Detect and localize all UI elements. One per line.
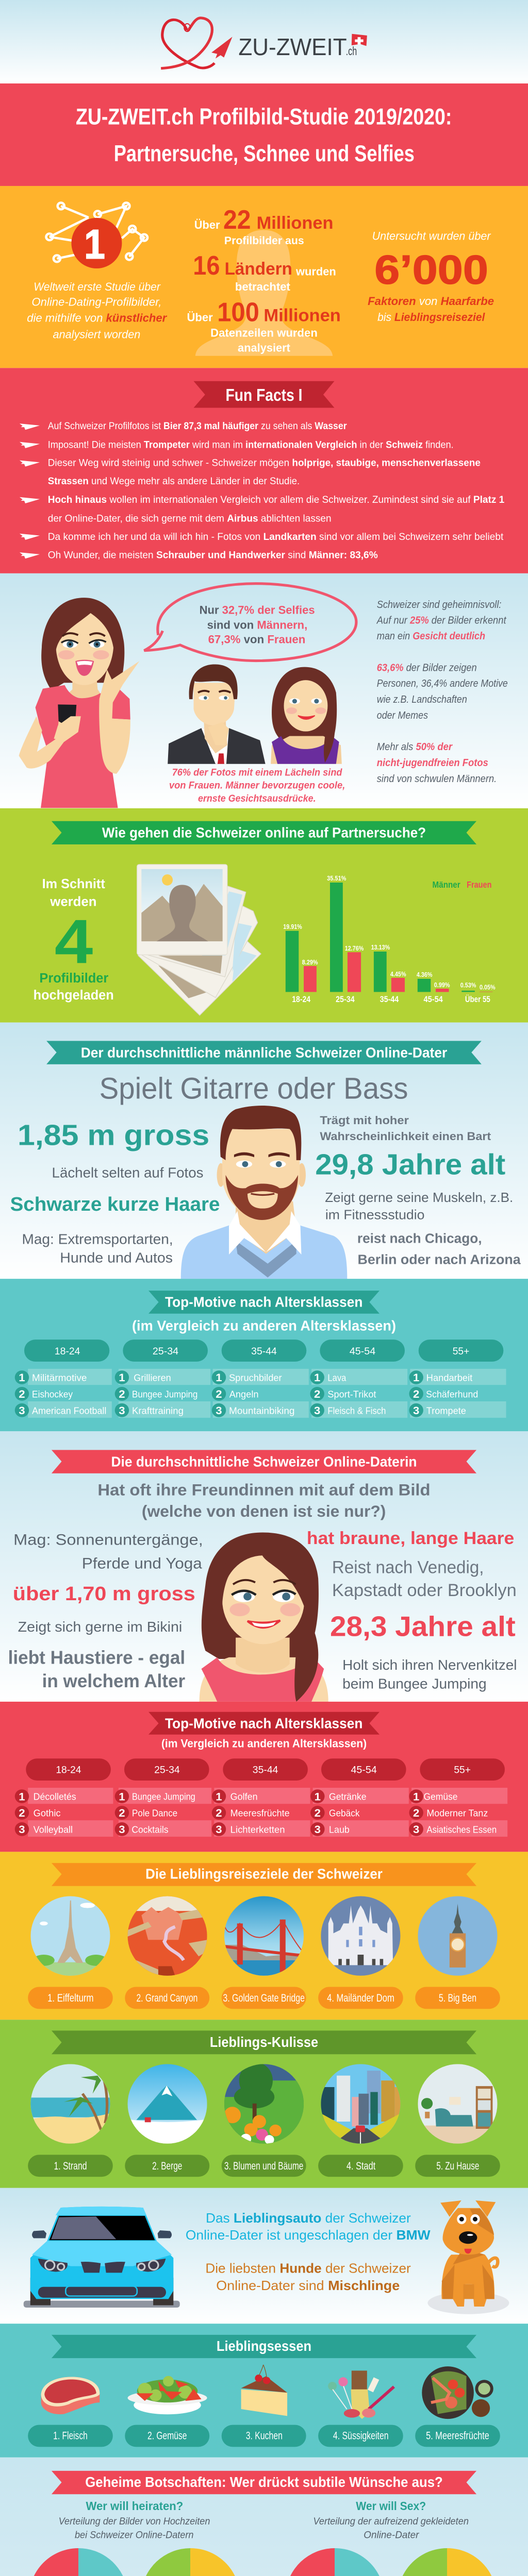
text: female traits left: Mag: Sonnenuntergänge, [13, 1532, 203, 1549]
text: who wants to marry: Wer will heiraten? [86, 2499, 183, 2513]
labels: backdrops [28, 2155, 500, 2177]
text: friends on picture [97, 1481, 431, 1520]
text: four profile pictures [34, 876, 114, 1003]
table: ranked motives by age: 1 [413, 1371, 419, 1384]
subheading: (im Vergleich zu anderen Altersklassen) [132, 1318, 396, 1333]
panel: Fun Facts I [0, 368, 528, 573]
text: who wants to marry [59, 2499, 210, 2541]
text: female traits left: über 1,70 m gross [13, 1583, 195, 1605]
chart: photos per age group: 0.99% [434, 981, 450, 989]
text: female traits right: Holt sich ihren Nervenkitzel [342, 1657, 517, 1673]
panel: favourite car and dog [0, 2188, 528, 2324]
labels: food: 3. Kuchen [246, 2429, 283, 2442]
table: ranked motives by age: Golfen [230, 1791, 258, 1802]
callout: speech bubble selfies: Nur 32,7% der Selfies [200, 604, 315, 616]
heading ribbon [52, 2471, 476, 2494]
text: male traits left: Lächelt selten auf Fotos [52, 1165, 203, 1181]
list: fun facts: Imposant! Die meisten Trompeter wird man im internationalen Vergleich in der Schweiz finden. [48, 439, 454, 450]
text: male traits left: Hunde und Autos [60, 1250, 173, 1266]
icon: Big Ben [418, 1896, 498, 1976]
chart: photos per age group: 18-24 [292, 994, 311, 1004]
age group pills: 35-44 [253, 1765, 278, 1775]
text: female traits left: Zeigt sich gerne im Bikini [18, 1619, 182, 1635]
labels: destinations: 1. Eiffelturm [47, 1991, 94, 2004]
heading ribbon: Fun Facts I: Fun Facts I [226, 386, 302, 405]
table: ranked motives by age: 3 [216, 1823, 222, 1836]
table: ranked motives by age: Sport-Trikot [327, 1389, 376, 1399]
labels: backdrops: 3. Blumen und Bäume [224, 2159, 303, 2172]
chart: photos per age group: 8.29% [302, 958, 318, 966]
chart: photos per age group: 19.91% [283, 923, 302, 930]
icon: neural network with number 1: 1 [84, 222, 105, 267]
text: female traits right: hat braune, lange Haare [307, 1528, 514, 1548]
chart: marriage by orientation [141, 2548, 240, 2576]
table: ranked motives by age: 1 [19, 1371, 25, 1384]
panel: top motives men [0, 1279, 528, 1431]
illustration: thinking man [168, 664, 266, 764]
table: ranked motives by age: 3 [216, 1404, 222, 1417]
table: ranked motives by age: Lava [327, 1372, 346, 1383]
text: study statistics: Ländern [225, 259, 292, 279]
text: study statistics: wurden [295, 265, 336, 278]
labels: food: 1. Fleisch [53, 2429, 88, 2442]
text: photo motive facts: wie z.B. Landschaften [377, 693, 467, 705]
text: photo motive facts: sind von schwulen Männern. [377, 773, 497, 785]
chart: photos per age group: 25-34 [336, 994, 355, 1004]
text: 6000 factors: 6’000 [374, 247, 488, 292]
table: ranked motives by age: Pole Dance [132, 1808, 177, 1818]
illustration: mixed-breed dog [427, 2200, 509, 2314]
text: photo motive facts: Auf nur 25% der Bilder erkennt [376, 615, 507, 626]
chart: photos per age group: 0.53% [460, 981, 476, 989]
icon: mountains [128, 2064, 207, 2144]
chart: photos per age group: Männer [433, 879, 460, 890]
text: who wants to marry: Verteilung der Bilder von Hochzeiten [59, 2516, 210, 2527]
text: first study worldwide [27, 280, 167, 341]
text: female traits right: beim Bungee Jumping [342, 1676, 487, 1692]
table: ranked motives by age: 2 [413, 1806, 419, 1819]
chart: photos per age group: 35-44 [380, 994, 399, 1004]
labels: backdrops: 2. Berge [152, 2159, 182, 2172]
logo: ZU-ZWEIT.ch [161, 18, 367, 69]
text: photo motive facts: nicht-jugendfreien Fotos [377, 757, 488, 769]
panel: favourite destinations [0, 1852, 528, 2020]
labels: backdrops: 5. Zu Hause [436, 2159, 479, 2172]
icon: Grand Canyon [128, 1896, 207, 1976]
text: photo motive facts: Mehr als 50% der [377, 741, 453, 753]
list: fun facts: Hoch hinaus wollen im internationalen Vergleich vor allem die Schweizer. Zumindest sind sie auf Platz 1 [48, 494, 504, 505]
table: ranked motives by age: Schäferhund [426, 1389, 478, 1399]
text: favourite car [186, 2210, 431, 2243]
icon: seafood bowl [422, 2366, 493, 2419]
table: ranked motives by age: Fleisch & Fisch [327, 1405, 386, 1416]
table: ranked motives by age: Gemüse [424, 1791, 458, 1802]
text: first study worldwide: Online-Dating-Profilbilder, [31, 296, 161, 309]
heading ribbon [52, 1450, 476, 1473]
panel: average male online dater [0, 1023, 528, 1279]
subheading: (im Vergleich zu anderen Altersklassen) [161, 1737, 367, 1750]
icon: garden [224, 2062, 304, 2144]
text: male traits right [315, 1114, 521, 1267]
text: study statistics [187, 205, 341, 354]
text: favourite car: Das Lieblingsauto der Schweizer [206, 2210, 411, 2226]
table: ranked motives by age: Volleyball [34, 1824, 73, 1835]
text: male traits left: 1,85 m gross [18, 1120, 209, 1151]
text: photo motive facts: 63,6% der Bilder zeigen [377, 662, 477, 673]
table: ranked motives by age: Eishockey [32, 1389, 73, 1399]
age group pills: 25-34 [154, 1765, 180, 1775]
chart: photos per age group: 0.05% [480, 983, 496, 991]
table: ranked motives by age: Moderner Tanz [426, 1808, 488, 1818]
text: 6000 factors: bis Lieblingsreiseziel [377, 311, 485, 324]
text: female traits right [307, 1528, 517, 1692]
heading ribbon: Fun Facts I [194, 381, 334, 408]
table: ranked motives by age [15, 1788, 507, 1837]
age group pills: 18-24 [55, 1346, 80, 1357]
heading ribbon: Der durchschnittliche männliche Schweizer Online-Dater [81, 1045, 447, 1060]
text: photo motive facts [376, 599, 508, 785]
heading ribbon: Top-Motive nach Altersklassen [165, 1294, 362, 1310]
table: ranked motives by age: 1 [216, 1790, 222, 1803]
heading: study title: ZU-ZWEIT.ch Profilbild-Studie 2019/2020: [76, 104, 452, 130]
table: ranked motives by age: 3 [314, 1404, 320, 1417]
text: smile caption [169, 767, 345, 804]
text: first study worldwide: die mithilfe von künstlicher [27, 312, 167, 324]
panel: favourite food [0, 2324, 528, 2458]
labels: food: 2. Gemüse [147, 2429, 187, 2442]
chart: photos per age group: 13.13% [371, 943, 390, 951]
chart: marriage by gender [29, 2548, 128, 2576]
table: ranked motives by age: Laub [329, 1824, 350, 1835]
text: female traits right: 28,3 Jahre alt [330, 1611, 516, 1642]
chart: photos per age group: Über 55 [465, 994, 490, 1004]
text: photo motive facts: oder Memes [377, 709, 428, 721]
panel: favourite backdrops [0, 2020, 528, 2188]
text: smile caption: ernste Gesichtsausdrücke. [198, 793, 316, 804]
table: ranked motives by age: 2 [119, 1806, 125, 1819]
text: four profile pictures: 4 [55, 907, 93, 976]
text: male traits right: Berlin oder nach Arizona [358, 1253, 521, 1267]
callout: speech bubble selfies: sind von Männern, [207, 619, 307, 632]
panel: average female online dater [0, 1431, 528, 1702]
text: male traits left: Schwarze kurze Haare [10, 1194, 220, 1215]
text: favourite car: Online-Dater ist ungeschlagen der BMW [186, 2227, 431, 2243]
icon: Eiffel Tower [30, 1896, 110, 1976]
heading ribbon: Lieblings-Kulisse [210, 2035, 318, 2050]
text: who wants sex [313, 2499, 469, 2541]
heading ribbon: Top-Motive nach Altersklassen [165, 1716, 362, 1732]
text: female traits right: Kapstadt oder Brooklyn [332, 1581, 517, 1600]
callout: speech bubble selfies [144, 584, 356, 661]
chart: photos per age group: 35.51% [327, 874, 346, 882]
list: fun facts: Auf Schweizer Profilfotos ist Bier 87,3 mal häufiger zu sehen als Wasser [48, 420, 347, 432]
text: male traits left [10, 1120, 220, 1266]
text: favourite dog: Online-Dater sind Mischlinge [216, 2278, 400, 2293]
text: four profile pictures: werden [50, 894, 96, 909]
text: study statistics: 16 [193, 251, 220, 281]
table: ranked motives by age: 1 [19, 1790, 25, 1803]
table: ranked motives by age: Bungee Jumping [132, 1389, 197, 1399]
age group pills [26, 1758, 505, 1781]
table: ranked motives by age: 2 [119, 1387, 125, 1400]
text: photo motive facts: man ein Gesicht deutlich [377, 630, 485, 642]
text: 6000 factors [368, 230, 494, 324]
table: ranked motives by age: 1 [119, 1790, 125, 1803]
table: ranked motives by age: 2 [314, 1387, 320, 1400]
labels: destinations: 3. Golden Gate Bridge [223, 1991, 305, 2004]
icon: sweets [328, 2370, 394, 2419]
text: who wants sex: Verteilung der aufreizend gekleideten [313, 2516, 469, 2527]
icon: paper plane bullets [20, 423, 40, 558]
table: ranked motives by age: 3 [119, 1404, 125, 1417]
text: study statistics: Profilbilder aus [224, 234, 304, 247]
table: ranked motives by age: 3 [315, 1823, 321, 1836]
text: male traits right: reist nach Chicago, [357, 1232, 482, 1246]
table: ranked motives by age: Handarbeit [426, 1372, 473, 1383]
labels: food: 5. Meeresfrüchte [426, 2429, 489, 2442]
list: fun facts: Oh Wunder, die meisten Schrauber und Handwerker sind Männer: 83,6% [48, 550, 378, 561]
labels: destinations: 2. Grand Canyon [136, 1991, 197, 2004]
heading ribbon: Die Lieblingsreiseziele der Schweizer [145, 1866, 383, 1882]
heading: study title: Partnersuche, Schnee und Selfies [114, 141, 415, 166]
icon: cake [241, 2365, 287, 2416]
icon: city [321, 2064, 400, 2144]
list: fun facts: der Online-Dater, die sich gerne mit dem Airbus ablichten lassen [48, 513, 332, 524]
text: favourite dog [205, 2261, 411, 2293]
panel: study key figures [0, 186, 528, 368]
table: ranked motives by age [15, 1369, 506, 1418]
age group pills: 45-54 [351, 1765, 377, 1775]
table: ranked motives by age: 1 [119, 1371, 125, 1384]
age group pills: 55+ [453, 1346, 469, 1357]
age group pills [24, 1340, 503, 1362]
text: male traits right: Trägt mit hoher [320, 1114, 409, 1127]
illustration: average man [181, 1106, 347, 1279]
heading ribbon [148, 1291, 380, 1314]
icon: steak [41, 2377, 100, 2414]
text: female traits left [8, 1532, 203, 1691]
text: male traits right: im Fitnessstudio [325, 1207, 425, 1223]
list: fun facts [48, 420, 504, 561]
table: ranked motives by age: 1 [314, 1371, 320, 1384]
chart: photos per age group: 4.36% [417, 971, 433, 978]
age group pills: 45-54 [350, 1346, 375, 1357]
text: study statistics: analysiert [238, 342, 290, 354]
labels: backdrops: 1. Strand [54, 2159, 87, 2172]
table: ranked motives by age: Gothic [34, 1808, 61, 1818]
labels: destinations: 5. Big Ben [439, 1991, 476, 2004]
table: ranked motives by age: 3 [119, 1823, 125, 1836]
heading ribbon: Wie gehen die Schweizer online auf Partnersuche? [102, 825, 426, 841]
icon: Golden Gate Bridge [224, 1896, 304, 1976]
panel: header with logo [0, 0, 528, 83]
labels: backdrops: 4. Stadt [346, 2159, 375, 2172]
labels: food: 4. Süssigkeiten [333, 2429, 389, 2442]
heading ribbon [52, 1863, 476, 1886]
chart: sex by orientation [398, 2548, 497, 2576]
text: male traits right: 29,8 Jahre alt [315, 1149, 505, 1181]
text: study statistics: betrachtet [235, 280, 290, 293]
table: ranked motives by age: 2 [19, 1387, 25, 1400]
table: ranked motives by age: 2 [216, 1387, 222, 1400]
text: female traits left: Pferde und Yoga [82, 1555, 202, 1572]
list: fun facts: Dieser Weg wird steinig und schwer - Schweizer mögen holprige, staubige, menschenverlassene [48, 457, 481, 468]
table: ranked motives by age: 3 [19, 1823, 25, 1836]
table: ranked motives by age: Bungee Jumping [132, 1791, 195, 1802]
table: ranked motives by age: Trompete [426, 1405, 466, 1416]
text: study statistics: Datenzeilen wurden [210, 327, 318, 340]
text: first study worldwide: Weltweit erste Studie über [34, 280, 161, 293]
text: first study worldwide: analysiert worden [53, 328, 140, 341]
heading ribbon [52, 2335, 476, 2358]
heading: study title [76, 104, 452, 166]
table: ranked motives by age: Lichterketten [230, 1824, 285, 1835]
table: ranked motives by age: 1 [413, 1790, 419, 1803]
table: ranked motives by age: Gebäck [329, 1808, 360, 1818]
heading ribbon [148, 1712, 380, 1735]
table: ranked motives by age: 3 [413, 1823, 419, 1836]
text: female traits left: liebt Haustiere - egal [8, 1647, 185, 1668]
text: smile caption: von Frauen. Männer bevorzugen coole, [169, 780, 345, 791]
illustration: smiling woman [271, 667, 342, 764]
heading ribbon: Die durchschnittliche Schweizer Online-Daterin [111, 1454, 417, 1469]
table: ranked motives by age: Meeresfrüchte [230, 1808, 290, 1818]
age group pills: 55+ [454, 1765, 471, 1775]
text: who wants sex: Online-Dater [364, 2530, 420, 2541]
logo: ZU-ZWEIT.ch: .ch [346, 44, 357, 58]
list: fun facts: Strassen und Wege mehr als andere Länder in der Studie. [48, 476, 300, 487]
chart: photos per age group: 12.76% [345, 944, 364, 952]
table: ranked motives by age: Cocktails [131, 1824, 169, 1835]
heading ribbon [52, 821, 476, 844]
table: ranked motives by age: 2 [19, 1806, 25, 1819]
text: friends on picture: Hat oft ihre Freundinnen mit auf dem Bild [97, 1481, 431, 1499]
text: female traits left: in welchem Alter [42, 1670, 185, 1691]
table: ranked motives by age: 3 [19, 1404, 25, 1417]
text: who wants to marry: bei Schweizer Online-Datern [75, 2530, 194, 2541]
text: study statistics: Über [187, 311, 213, 324]
text: 6000 factors: Faktoren von Haarfarbe [368, 295, 494, 308]
logo: ZU-ZWEIT.ch: ZU-ZWEIT [238, 34, 347, 60]
text: favourite dog: Die liebsten Hunde der Schweizer [205, 2261, 411, 2276]
icon: salad [128, 2376, 207, 2414]
text: study statistics: Millionen [257, 213, 334, 233]
text: four profile pictures: hochgeladen [34, 988, 114, 1003]
text: four profile pictures: Profilbilder [39, 971, 108, 986]
table: ranked motives by age: Spruchbilder [229, 1372, 282, 1383]
list: fun facts: Da komme ich her und da will ich hin - Fotos von Landkarten sind vor allem bei Schweizern sehr beliebt [48, 531, 504, 543]
table: ranked motives by age: 2 [216, 1806, 222, 1819]
age group pills: 35-44 [251, 1346, 277, 1357]
labels: destinations: 4. Mailänder Dom [327, 1991, 394, 2004]
labels: destinations [28, 1987, 500, 2009]
heading ribbon [52, 2030, 476, 2054]
chart: photos per age group [283, 874, 496, 1004]
table: ranked motives by age: 3 [413, 1404, 419, 1417]
text: male traits right: Zeigt gerne seine Muskeln, z.B. [325, 1190, 513, 1205]
heading ribbon [46, 1041, 482, 1064]
text: study statistics: 100 [217, 297, 259, 328]
text: study statistics: 22 [223, 205, 251, 235]
text: four profile pictures: Im Schnitt [42, 876, 105, 891]
table: ranked motives by age: Mountainbiking [229, 1405, 294, 1416]
chart: photos per age group: 45-54 [424, 994, 443, 1004]
text: photo motive facts: Schweizer sind geheimnisvoll: [377, 599, 501, 611]
chart: photos per age group: 4.45% [390, 970, 406, 978]
text: male traits left: Mag: Extremsportarten, [22, 1231, 173, 1247]
table: ranked motives by age: Asiatisches Essen [426, 1824, 497, 1835]
table: ranked motives by age: Décolletés [34, 1791, 76, 1802]
text: smile caption: 76% der Fotos mit einem Lächeln sind [172, 767, 342, 778]
illustration: stack of photos [137, 865, 261, 1015]
text: friends on picture: (welche von denen ist sie nur?) [142, 1502, 386, 1520]
text: male traits right: Wahrscheinlichkeit einen Bart [320, 1130, 491, 1143]
panel: main title [0, 83, 528, 186]
icon: beach [30, 2064, 110, 2144]
heading ribbon: Lieblingsessen [217, 2338, 311, 2354]
text: photo motive facts: Personen, 36,4% andere Motive [377, 677, 508, 689]
panel: selfies [0, 573, 528, 808]
icon: neural network with number 1 [46, 202, 147, 268]
text: female traits right: Reist nach Venedig, [332, 1557, 484, 1577]
callout: speech bubble selfies: 67,3% von Frauen [208, 633, 305, 646]
table: ranked motives by age: Getränke [329, 1791, 367, 1802]
text: study statistics: Millionen [263, 306, 341, 326]
panel: top motives women [0, 1702, 528, 1852]
icon: Milan Cathedral [321, 1896, 400, 1976]
illustration: woman with phone [19, 598, 139, 808]
text: study statistics: Über [194, 218, 220, 231]
chart: photos per age group: Frauen [467, 879, 491, 890]
icon: profile silhouette [195, 230, 333, 356]
age group pills: 18-24 [56, 1765, 81, 1775]
icon: living room [418, 2064, 498, 2144]
table: ranked motives by age: 2 [315, 1806, 321, 1819]
table: ranked motives by age: 1 [216, 1371, 222, 1384]
table: ranked motives by age: Krafttraining [132, 1405, 184, 1416]
table: ranked motives by age: Militärmotive [32, 1372, 87, 1383]
panel: secret messages [0, 2458, 528, 2576]
table: ranked motives by age: Grillieren [134, 1372, 171, 1383]
text: who wants sex: Wer will Sex? [356, 2499, 426, 2513]
table: ranked motives by age: Angeln [229, 1389, 259, 1399]
table: ranked motives by age: 1 [315, 1790, 321, 1803]
illustration: blue BMW [24, 2207, 180, 2308]
age group pills: 25-34 [153, 1346, 178, 1357]
chart: sex by gender [285, 2548, 384, 2576]
table: ranked motives by age: American Football [32, 1405, 106, 1416]
labels: food [28, 2425, 500, 2447]
table: ranked motives by age: 2 [413, 1387, 419, 1400]
text: plays guitar: Spielt Gitarre oder Bass [100, 1071, 408, 1105]
text: 6000 factors: Untersucht wurden über [372, 230, 491, 243]
illustration: average woman [200, 1532, 328, 1702]
panel: how the Swiss search online [0, 808, 528, 1023]
heading ribbon: Geheime Botschaften: Wer drückt subtile Wünsche aus? [85, 2474, 443, 2490]
